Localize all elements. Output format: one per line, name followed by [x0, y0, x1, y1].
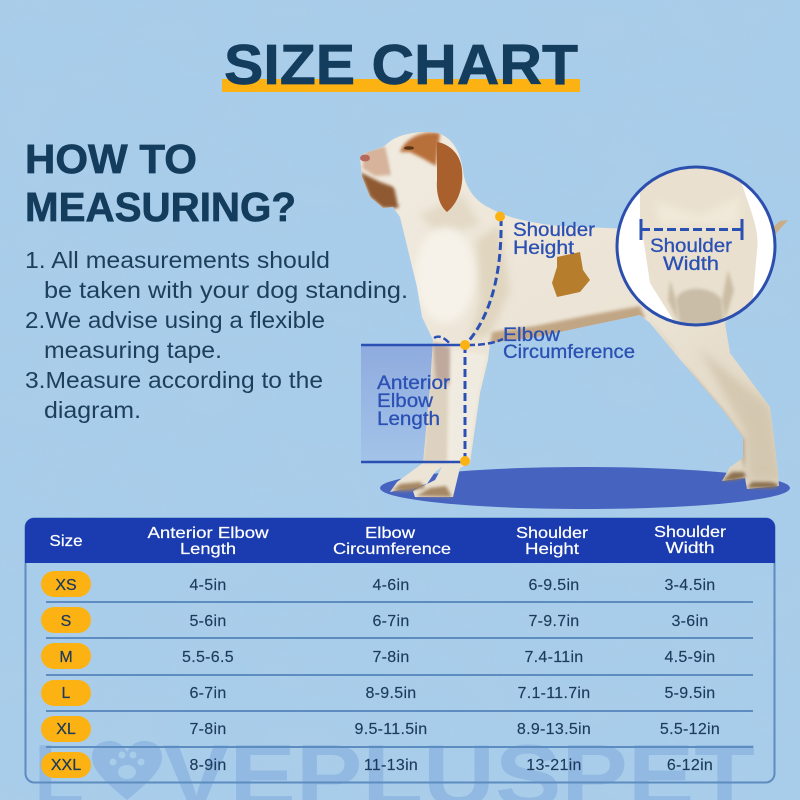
measure lines on dog	[361, 212, 505, 466]
row M: 7-8in	[372, 649, 410, 666]
instructions list: diagram.	[44, 397, 141, 423]
fur shading	[360, 132, 780, 480]
table frame	[26, 518, 774, 782]
row XXL: 11-13in	[364, 757, 418, 774]
row M	[41, 643, 716, 669]
row M: 5.5-6.5	[182, 649, 234, 666]
table header: Height	[525, 541, 580, 558]
row XS: 6-9.5in	[528, 577, 580, 594]
size table	[25, 518, 775, 782]
elbow pink shading	[433, 342, 450, 385]
row L: 6-7in	[189, 685, 227, 702]
row S: 5-6in	[189, 613, 227, 630]
row XS: XS	[55, 577, 77, 594]
row XXL: 13-21in	[526, 757, 582, 774]
table header: Shoulder	[516, 525, 589, 542]
table header: Length	[180, 541, 236, 558]
row M: 4.5-9in	[664, 649, 716, 666]
body spot	[552, 252, 590, 297]
title underline	[222, 79, 580, 92]
muzzle mottling	[362, 146, 392, 176]
ear	[437, 142, 462, 212]
heading: how to measuring: HOW TO	[25, 136, 197, 182]
shoulder width inset	[617, 165, 775, 326]
anterior elbow dashed line	[464, 345, 466, 462]
instructions list: be taken with your dog standing.	[44, 277, 408, 303]
shoulder shadow	[470, 225, 510, 340]
row XS	[41, 571, 716, 597]
row XXL: XXL	[51, 757, 81, 774]
table header	[25, 518, 775, 563]
anterior elbow panel	[361, 345, 441, 462]
hind paws	[722, 472, 778, 488]
hind leg tone	[704, 356, 778, 480]
row L: 7.1-11.7in	[518, 685, 590, 702]
label: anterior elbow length: Anterior	[377, 373, 451, 394]
lower muzzle	[360, 172, 402, 208]
label: elbow circumference: Elbow	[503, 325, 560, 346]
instructions list	[25, 247, 408, 423]
anterior elbow bottom line	[361, 461, 465, 463]
row XXL: 8-9in	[189, 757, 227, 774]
table header: Shoulder	[654, 524, 727, 541]
instructions list: 3.Measure according to the	[25, 367, 323, 393]
label: elbow circumference: Circumference	[503, 342, 635, 363]
shoulder height dashed curve	[467, 218, 501, 343]
marker dots	[460, 212, 505, 466]
label: shoulder height: Height	[513, 238, 575, 259]
inset chest shading	[662, 206, 735, 324]
instructions list: measuring tape.	[44, 337, 222, 363]
inset white disc	[618, 168, 774, 324]
row XXL	[41, 752, 713, 778]
title text: SIZE CHART	[224, 33, 578, 97]
dog silhouette	[360, 132, 779, 497]
row XL: XL	[56, 721, 76, 738]
row separators	[46, 602, 753, 747]
row S: S	[61, 613, 71, 630]
width measure line	[641, 219, 742, 240]
head brown patch	[400, 132, 440, 166]
near foreleg highlight	[448, 352, 484, 460]
row S: 6-7in	[372, 613, 410, 630]
title	[222, 33, 580, 97]
table header: Circumference	[333, 541, 451, 558]
row XS: 4-6in	[372, 577, 410, 594]
row S: 7-9.7in	[528, 613, 580, 630]
row L	[41, 680, 716, 706]
anterior elbow top line	[361, 344, 465, 346]
row XL: 9.5-11.5in	[355, 721, 427, 738]
row M: 7.4-11in	[524, 649, 584, 666]
nose	[360, 154, 370, 162]
row XXL: 6-12in	[667, 757, 713, 774]
shoulder width label: Shoulder	[650, 236, 733, 257]
dog illustration	[360, 132, 788, 497]
row XL	[41, 716, 720, 742]
row S	[41, 607, 709, 633]
row XL: 7-8in	[189, 721, 227, 738]
label: anterior elbow length: Length	[377, 409, 440, 430]
row XL: 8.9-13.5in	[517, 721, 591, 738]
row XS: 3-4.5in	[664, 577, 716, 594]
row S: 3-6in	[671, 613, 709, 630]
floor ellipse	[380, 467, 790, 509]
row XL: 5.5-12in	[660, 721, 720, 738]
inset ring	[617, 167, 775, 325]
front paws	[392, 482, 452, 497]
table header: Width	[666, 540, 714, 557]
heading: how to measuring	[25, 136, 296, 230]
instructions list: 1. All measurements should	[25, 247, 330, 273]
label: shoulder height: Shoulder	[513, 220, 596, 241]
table header: Elbow	[365, 525, 416, 542]
row L: 5-9.5in	[664, 685, 716, 702]
inset chest photo	[640, 165, 758, 326]
tail	[768, 220, 788, 240]
thigh shadow	[662, 336, 746, 467]
eye	[404, 146, 414, 150]
elbow circumference dashed line	[434, 337, 503, 345]
chest highlight	[415, 227, 475, 323]
table header: Size	[50, 533, 83, 550]
row L: 8-9.5in	[365, 685, 417, 702]
label: anterior elbow length: Elbow	[377, 391, 433, 412]
white blaze	[389, 162, 404, 206]
far foreleg tone	[423, 345, 448, 463]
row M: M	[59, 649, 73, 666]
instructions list: 2.We advise using a flexible	[25, 307, 325, 333]
table header: Anterior Elbow	[148, 525, 269, 542]
belly shadow	[490, 306, 645, 345]
row L: L	[62, 685, 71, 702]
row XS: 4-5in	[189, 577, 227, 594]
neck shadow	[422, 196, 478, 230]
shoulder width label: Width	[663, 254, 719, 275]
heading: how to measuring: MEASURING?	[25, 184, 296, 230]
